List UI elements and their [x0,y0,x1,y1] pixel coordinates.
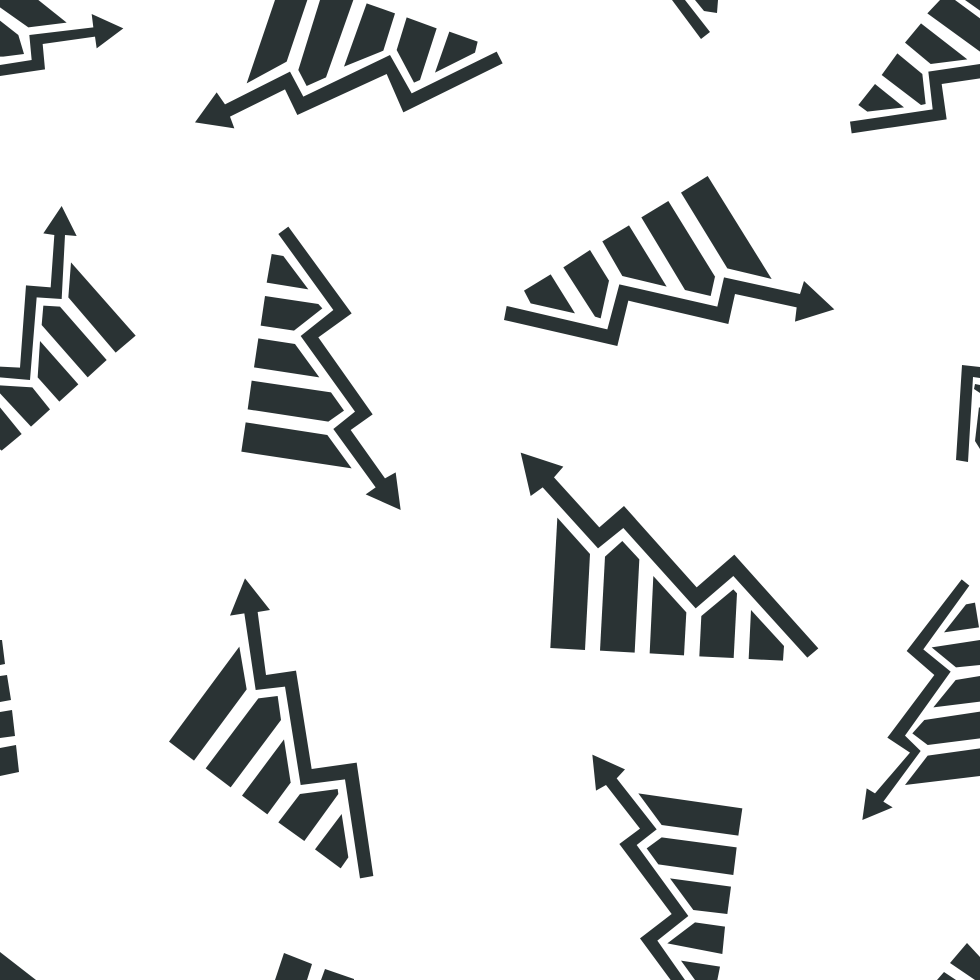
icon: right edge wrap of left-edge chart [956,365,980,462]
icon: bottom-left corner fragment [0,952,36,980]
icon: bottom-right corner fragments [937,943,980,980]
icon: left-center chart with arrow to lower right [241,227,401,510]
icon: center chart with arrow to upper left [521,453,818,661]
icon: left edge wrap of right-edge chart [0,640,19,776]
icon: top-right corner chart [850,0,980,133]
icon: lower-left chart with arrow up [169,578,373,878]
icon: top-left corner chart with arrow to the right [0,0,123,76]
icon: left-edge chart with arrow up [0,206,136,451]
icon: top edge wrap of bottom chart [672,0,718,39]
icon: top chart with arrow to lower left [195,0,503,128]
icon: bottom-center fragments [275,953,354,980]
icon: bottom chart with arrow to upper left [592,755,742,980]
icon: right-edge chart with arrow to lower left [862,579,980,820]
icon: upper-right chart with arrow to the right [504,176,834,346]
